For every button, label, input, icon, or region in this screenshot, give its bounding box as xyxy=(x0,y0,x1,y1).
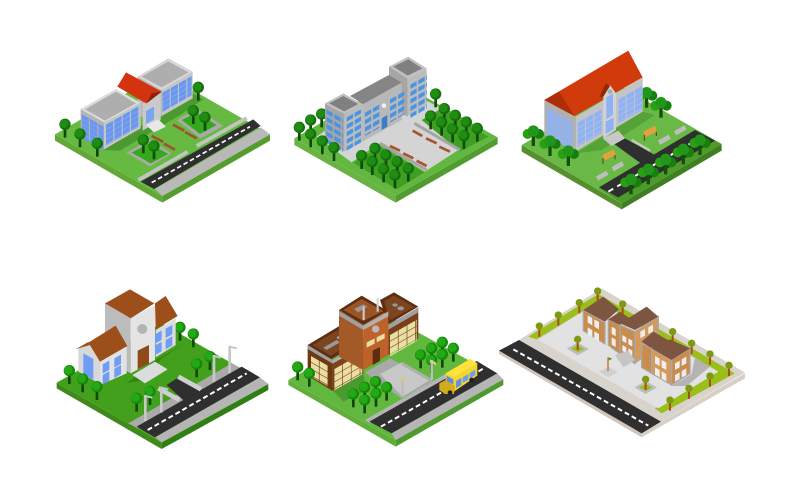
benches xyxy=(152,125,197,150)
trees xyxy=(523,125,711,194)
main building xyxy=(544,51,643,152)
right block xyxy=(380,292,418,356)
left wing xyxy=(81,89,141,151)
right school wing xyxy=(642,332,690,385)
road and driveway xyxy=(599,130,715,197)
back trees xyxy=(636,87,672,118)
right wing xyxy=(155,296,178,357)
road xyxy=(138,118,270,196)
ground block xyxy=(57,323,268,449)
entrance walls xyxy=(158,377,201,400)
benches xyxy=(602,126,657,164)
trees xyxy=(59,82,211,159)
scene 2: grey school with plaza xyxy=(294,57,498,203)
ground block xyxy=(522,87,722,209)
lamp posts xyxy=(401,359,436,397)
trees xyxy=(305,103,483,188)
central tower xyxy=(339,296,388,370)
planters xyxy=(127,108,223,167)
left wing xyxy=(76,326,127,385)
central block xyxy=(350,75,405,142)
trees xyxy=(292,361,392,413)
back trees xyxy=(174,322,216,377)
ground block xyxy=(55,73,270,203)
clock tower xyxy=(105,289,168,383)
scene 6: tan brick campus with lime lawn xyxy=(499,287,745,437)
ground block xyxy=(288,320,503,447)
road xyxy=(128,363,268,442)
trees xyxy=(64,365,156,412)
central school block xyxy=(615,307,658,367)
forecourt xyxy=(365,358,433,398)
planters and flag xyxy=(567,343,657,394)
back trees xyxy=(294,88,441,141)
right wing xyxy=(138,58,193,117)
barriers xyxy=(597,127,686,179)
right tower xyxy=(389,57,427,118)
left tower xyxy=(325,93,362,152)
ground block xyxy=(294,80,498,203)
road xyxy=(499,340,661,433)
left block xyxy=(308,326,363,391)
entrance tower xyxy=(599,83,625,146)
plaza xyxy=(538,302,718,408)
central entrance and red roof xyxy=(117,72,166,132)
walls xyxy=(380,123,460,170)
school bus xyxy=(439,359,477,395)
scene 5: brick school with school bus xyxy=(288,292,503,447)
lime lawn xyxy=(528,294,735,413)
lamp posts xyxy=(144,346,237,421)
road xyxy=(365,360,503,440)
benches xyxy=(390,131,450,166)
base block xyxy=(499,288,745,437)
plaza xyxy=(317,83,458,172)
trees xyxy=(536,287,733,411)
scene 3: school with large orange roof xyxy=(522,51,722,209)
back trees xyxy=(415,337,459,373)
left school wing xyxy=(583,297,630,354)
scene 4: white school with brown roof and clock tower xyxy=(57,289,268,449)
scene 1: school with red roof and planters xyxy=(55,58,270,203)
